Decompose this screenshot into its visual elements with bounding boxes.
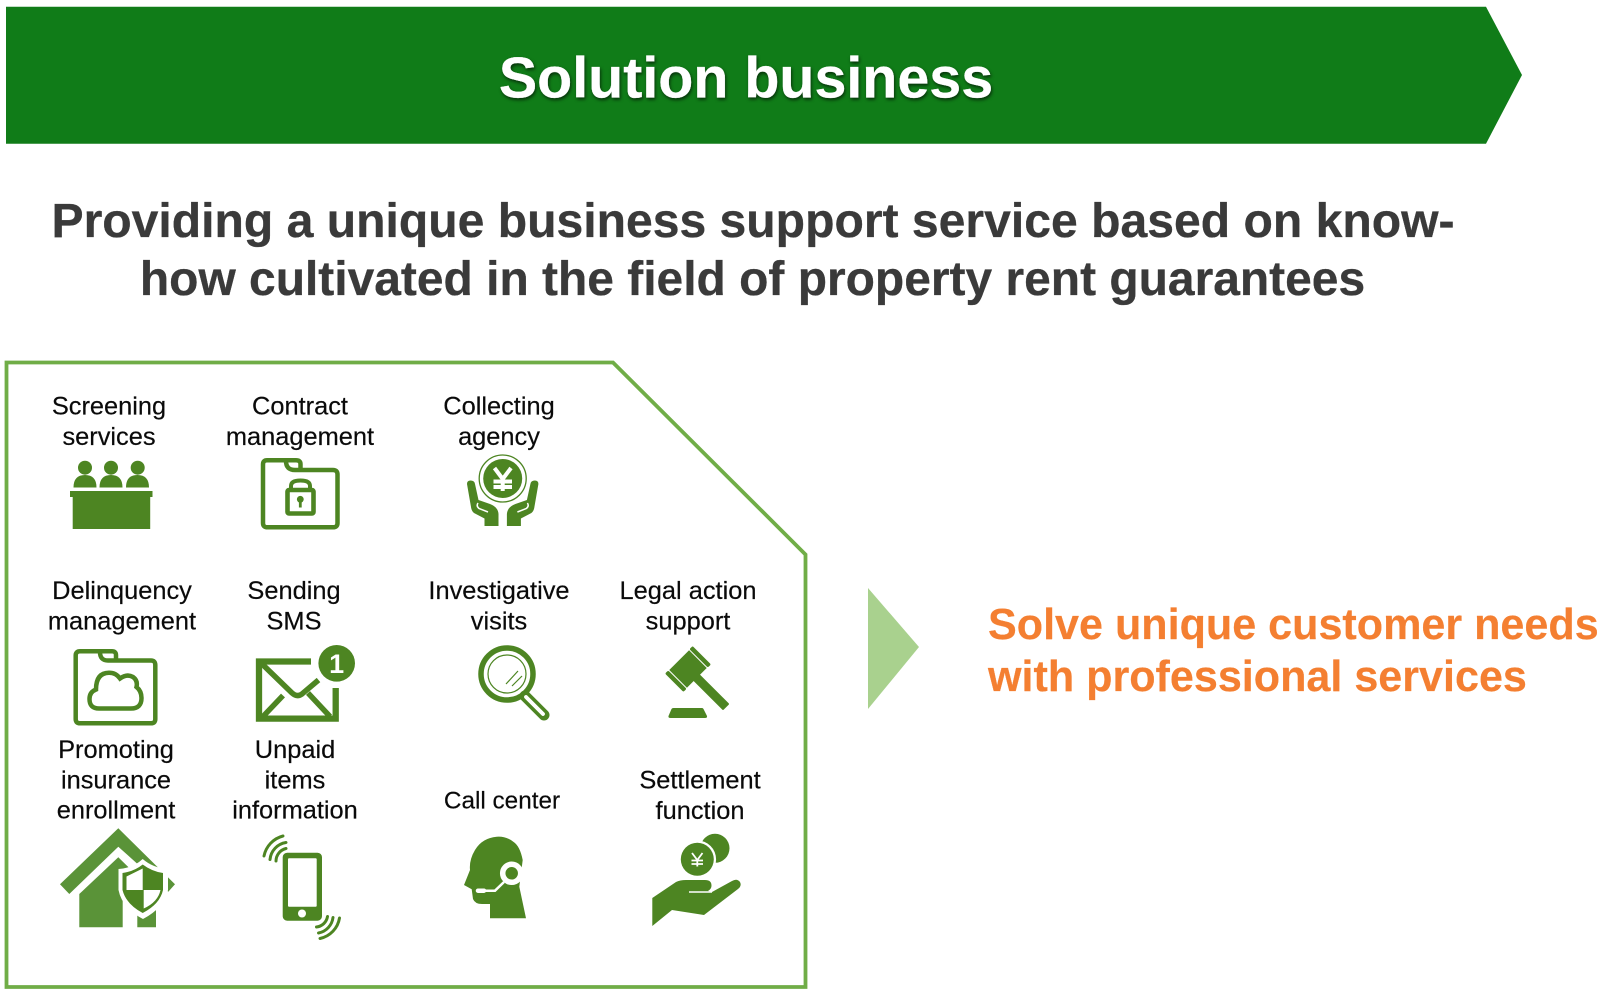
icon: cloud folder bbox=[76, 651, 155, 723]
icon: headset operator bbox=[464, 837, 526, 918]
label: sending sms: SMS bbox=[266, 608, 322, 636]
label: legal action support: support bbox=[646, 608, 730, 636]
arrow bbox=[868, 588, 919, 709]
icon: magnifying glass bbox=[481, 648, 544, 715]
icon: envelope with badge bbox=[259, 645, 355, 719]
label: screening services: Screening bbox=[52, 392, 166, 420]
label: legal action support: Legal action bbox=[620, 577, 756, 605]
label: delinquency management: Delinquency bbox=[52, 577, 192, 605]
title banner arrow bbox=[6, 7, 1522, 144]
label: investigative visits: visits bbox=[471, 608, 527, 636]
label: unpaid items information: items bbox=[265, 766, 325, 794]
label: settlement function: Settlement bbox=[639, 766, 761, 794]
label: collecting agency: agency bbox=[458, 423, 540, 451]
label: screening services: services bbox=[62, 423, 156, 451]
label: unpaid items information: information bbox=[232, 796, 358, 824]
label: unpaid items information: Unpaid bbox=[255, 736, 335, 764]
title: Solution business bbox=[499, 46, 993, 110]
icon: yen coin in hands bbox=[467, 455, 538, 526]
label: promoting insurance enrollment: Promoting bbox=[58, 736, 174, 764]
label: contract management: management bbox=[226, 423, 374, 451]
label: sending sms: Sending bbox=[247, 577, 341, 605]
icon: vibrating smartphone bbox=[264, 836, 340, 938]
subheading: Providing a unique business support service based on know- bbox=[51, 194, 1455, 248]
icon: envelope with badge: 1 bbox=[329, 649, 344, 679]
callout: with professional services bbox=[987, 653, 1527, 701]
subheading: how cultivated in the field of property rent guarantees bbox=[140, 253, 1365, 306]
label: settlement function: function bbox=[656, 797, 744, 825]
icon: coins over hand bbox=[652, 834, 741, 926]
icon: locked folder bbox=[263, 460, 338, 527]
label: investigative visits: Investigative bbox=[428, 577, 570, 605]
label: contract management: Contract bbox=[252, 392, 348, 420]
label: promoting insurance enrollment: enrollment bbox=[57, 796, 175, 824]
panel: services bbox=[6, 362, 806, 987]
icon: gavel bbox=[665, 646, 740, 721]
label: call center: Call center bbox=[444, 787, 560, 814]
icon: screening desk bbox=[70, 461, 152, 529]
label: delinquency management: management bbox=[48, 608, 196, 636]
callout: Solve unique customer needs bbox=[988, 601, 1599, 649]
label: collecting agency: Collecting bbox=[443, 392, 555, 420]
icon: house with shield bbox=[60, 828, 175, 930]
label: promoting insurance enrollment: insurance bbox=[61, 766, 171, 794]
